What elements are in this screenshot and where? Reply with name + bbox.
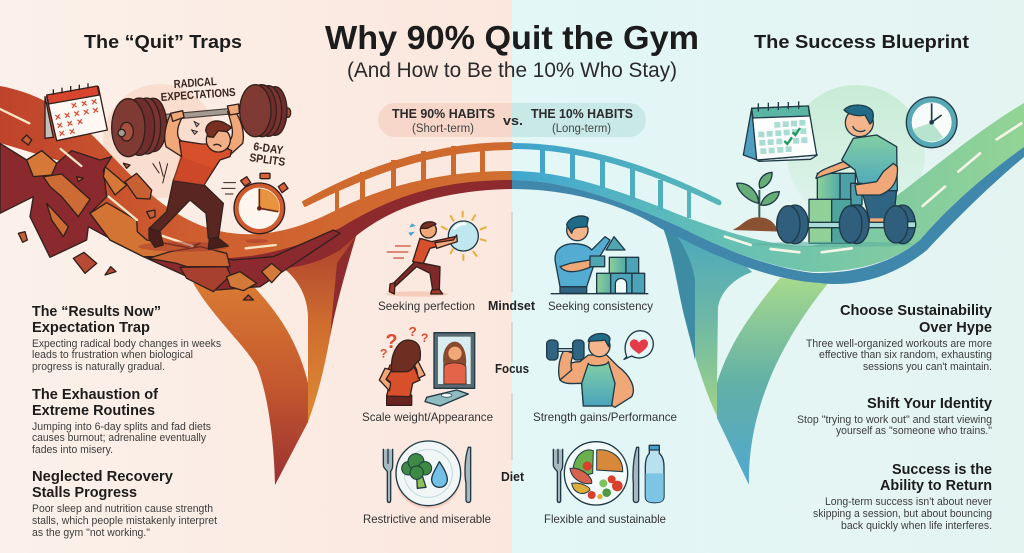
text block: neglected recovery: Poor sleep and nutrition cause strength bbox=[32, 503, 213, 515]
center illustrations lower rows bbox=[379, 324, 664, 509]
background: right half bbox=[512, 0, 1024, 553]
right section: illustration in 3x coordinates bbox=[725, 97, 1021, 252]
center illustrations top row bbox=[385, 212, 648, 297]
left bridge railing bbox=[303, 143, 512, 212]
text block: shift your identity: Shift Your Identity bbox=[867, 395, 993, 412]
figure building with blocks bbox=[842, 105, 897, 223]
icon: woman at mirror with scale: ? bbox=[409, 324, 417, 339]
text block: choose sustainability bbox=[806, 302, 993, 373]
icon: woman at mirror with scale: ? bbox=[421, 331, 428, 345]
illustration label: 6-day splits: 6-DAY bbox=[253, 141, 284, 157]
left bridge supports bbox=[193, 225, 356, 485]
text block: choose sustainability: Three well-organized workouts are more bbox=[806, 338, 992, 350]
text block: exhaustion of extreme routines: Jumping into 6-day splits and fad diets bbox=[32, 421, 211, 433]
comparison labels: diet row: Diet bbox=[501, 469, 525, 484]
illustration label: radical expectations bbox=[160, 76, 236, 104]
heading: the success blueprint: The Success Blueprint bbox=[754, 32, 969, 52]
text block: neglected recovery: stalls, which people mistakenly interpret bbox=[32, 515, 217, 527]
comparison labels: diet row: Flexible and sustainable bbox=[544, 512, 666, 526]
illustration label: radical expectations: EXPECTATIONS bbox=[160, 87, 236, 104]
icon: woman at mirror with scale: ? bbox=[385, 331, 398, 353]
text block: shift your identity: Stop "trying to work out" and start viewing bbox=[797, 414, 992, 426]
comparison labels: focus row bbox=[362, 361, 677, 424]
text block: success is the ability to return: back quickly when life interferes. bbox=[841, 520, 992, 532]
icon: woman at mirror with scale bbox=[379, 324, 475, 406]
stacked blocks bbox=[809, 162, 897, 243]
road dashes bbox=[0, 109, 276, 248]
icon: chasing perfect sphere bbox=[385, 212, 486, 297]
comparison labels: diet row bbox=[363, 469, 666, 526]
text block: exhaustion of extreme routines: causes burnout; adrenaline eventually bbox=[32, 432, 206, 444]
text block: choose sustainability: effective than six random, exhausting bbox=[819, 349, 992, 361]
comparison pill: (Short-term) bbox=[412, 123, 474, 135]
comparison labels: focus row: Scale weight/Appearance bbox=[362, 410, 493, 424]
icon: calendar with crosses: ××× bbox=[56, 116, 84, 132]
text block: neglected recovery bbox=[32, 468, 217, 539]
comparison pill: THE 90% HABITS bbox=[392, 106, 495, 121]
text block: success is the ability to return: skipping a session, but about bouncing bbox=[813, 508, 992, 520]
text block: choose sustainability: Choose Sustainability bbox=[840, 302, 993, 319]
text block: results now expectation trap: leads to frustration when biological bbox=[32, 349, 193, 361]
icon: barbell bbox=[112, 85, 291, 157]
comparison pill: THE 10% HABITS bbox=[531, 106, 633, 121]
comparison labels: mindset row bbox=[378, 298, 653, 313]
text block: shift your identity bbox=[797, 395, 993, 437]
dividers bbox=[511, 212, 513, 460]
text block: exhaustion of extreme routines bbox=[32, 386, 211, 456]
comparison labels: mindset row: Seeking consistency bbox=[548, 299, 653, 313]
left road and bridge deck bbox=[0, 86, 512, 278]
text block: exhaustion of extreme routines: The Exhaustion of bbox=[32, 386, 159, 403]
heading: the quit traps: The “Quit” Traps bbox=[84, 32, 242, 52]
icon: flexible plate bbox=[553, 442, 664, 505]
comparison pill bbox=[378, 103, 646, 137]
icon: calendar with crosses bbox=[45, 83, 107, 141]
background: left half bbox=[0, 0, 512, 553]
icon: building consistent blocks bbox=[551, 216, 648, 294]
icon: stopwatch bbox=[234, 173, 288, 234]
text block: neglected recovery: Neglected Recovery bbox=[32, 468, 174, 485]
icon: woman at mirror with scale: ? bbox=[380, 346, 387, 360]
icon: seedling bbox=[733, 172, 780, 232]
text block: results now expectation trap: progress is naturally gradual. bbox=[32, 361, 165, 373]
text block: results now expectation trap: The “Results Now” bbox=[32, 303, 161, 320]
text block: results now expectation trap bbox=[32, 303, 221, 373]
pale circle behind lifter bbox=[103, 84, 217, 198]
text block: success is the ability to return: Ability to Return bbox=[880, 477, 992, 494]
cracked rocks bbox=[0, 135, 340, 300]
comparison pill: vs. bbox=[503, 113, 523, 128]
illustration label: 6-day splits bbox=[249, 141, 286, 169]
road dashes bbox=[725, 123, 1021, 252]
pale green circle behind builder bbox=[787, 85, 925, 223]
comparison labels: diet row: Restrictive and miserable bbox=[363, 512, 491, 526]
text block: choose sustainability: Over Hype bbox=[919, 319, 992, 336]
icon: calendar with crosses: ×× bbox=[58, 126, 76, 140]
lifter figure bbox=[138, 104, 268, 252]
text block: neglected recovery: as the gym "not working." bbox=[32, 527, 150, 539]
text block: exhaustion of extreme routines: Extreme Routines bbox=[32, 402, 155, 419]
right road and bridge deck bbox=[512, 103, 1024, 284]
text block: results now expectation trap: Expectation Trap bbox=[32, 319, 150, 336]
text block: success is the ability to return bbox=[813, 461, 992, 532]
icon: calendar with crosses: ××××× bbox=[54, 104, 100, 124]
comparison labels: focus row: Focus bbox=[495, 361, 529, 376]
left section: illustration in 3x coordinates bbox=[0, 83, 340, 300]
text block: exhaustion of extreme routines: fades into misery. bbox=[32, 444, 113, 456]
icon: barbell bbox=[753, 205, 916, 247]
text block: success is the ability to return: Success is the bbox=[892, 461, 992, 478]
text block: neglected recovery: Stalls Progress bbox=[32, 484, 137, 501]
right bridge supports bbox=[663, 228, 830, 485]
comparison labels: mindset row: Seeking perfection bbox=[378, 299, 475, 313]
icon: calendar with crosses: ××× bbox=[70, 96, 98, 112]
title: Why 90% Quit the Gym bbox=[325, 19, 699, 56]
text block: results now expectation trap: Expecting radical body changes in weeks bbox=[32, 338, 221, 350]
text block: success is the ability to return: Long-term success isn't about never bbox=[825, 496, 992, 508]
text block: shift your identity: yourself as "someone who trains." bbox=[836, 425, 992, 437]
icon: dumbbell curl with heart bbox=[547, 331, 653, 407]
icon: clock bbox=[906, 97, 957, 148]
comparison pill: (Long-term) bbox=[552, 123, 611, 135]
text block: choose sustainability: sessions you can't maintain. bbox=[863, 361, 992, 373]
illustration label: radical expectations: RADICAL bbox=[173, 76, 217, 91]
illustration label: 6-day splits: SPLITS bbox=[249, 152, 286, 169]
right bridge railing bbox=[512, 143, 721, 218]
comparison labels: mindset row: Mindset bbox=[488, 298, 536, 313]
comparison labels: focus row: Strength gains/Performance bbox=[533, 410, 677, 424]
icon: calendar with checks bbox=[743, 101, 817, 161]
icon: restrictive plate bbox=[383, 441, 471, 509]
subtitle: (And How to Be the 10% Who Stay) bbox=[347, 59, 677, 82]
